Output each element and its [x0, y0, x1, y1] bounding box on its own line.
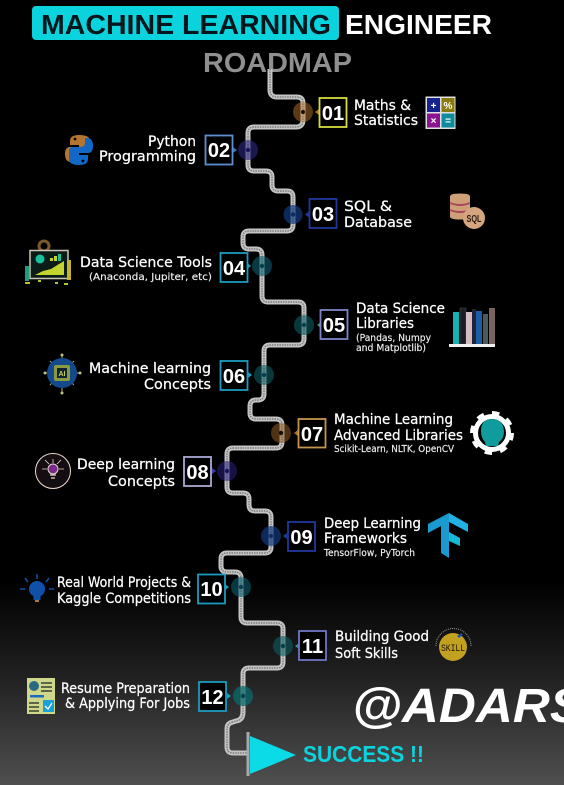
step 06: [44, 354, 274, 394]
step 05: 05: [323, 315, 345, 337]
step 04: (Anaconda, Jupiter, etc): [89, 272, 212, 283]
step 01: Statistics: [354, 113, 418, 129]
icon: calculator symbols: =: [445, 116, 451, 127]
winding road path: [221, 69, 304, 753]
step 10: Real World Projects &: [57, 575, 191, 591]
step 09: [261, 513, 468, 559]
step 08: 08: [186, 462, 209, 484]
step 07: Advanced Libraries: [334, 428, 463, 444]
icon: python logo: [65, 135, 93, 165]
step 02: Python: [148, 134, 196, 150]
icon: blue lightbulb: [20, 574, 54, 602]
step 12: & Applying For Jobs: [65, 696, 190, 712]
title: ROADMAP: [203, 47, 352, 78]
step 04: Data Science Tools: [80, 255, 212, 271]
step 04: [25, 241, 272, 284]
icon: books on shelf: [449, 308, 495, 347]
step 07: Scikit-Learn, NLTK, OpenCV: [334, 444, 454, 455]
step 03: [284, 194, 485, 231]
step 09: Deep Learning: [324, 516, 421, 532]
step 10: Kaggle Competitions: [57, 591, 191, 607]
step 12: 12: [201, 687, 224, 709]
step 08: Concepts: [108, 474, 175, 490]
signature watermark: @ADARS: [352, 680, 564, 733]
success flag: SUCCESS !!: [303, 741, 424, 767]
title: [32, 6, 492, 78]
icon: data dashboard board: [25, 241, 71, 284]
icon: SQL database: SQL: [466, 214, 482, 225]
step 08: [36, 454, 237, 490]
step 11: [273, 629, 471, 662]
icon: calculator symbols: %: [444, 101, 453, 112]
step 08: Deep learning: [77, 457, 175, 473]
icon: calculator symbols: +: [431, 101, 437, 112]
step 03: SQL &: [344, 199, 392, 215]
step 07: Machine Learning: [334, 412, 453, 428]
step 01: 01: [322, 103, 344, 125]
step 01: Maths &: [354, 98, 411, 114]
step 11: 11: [302, 636, 323, 658]
step 05: Libraries: [356, 316, 414, 332]
icon: skill badge: [436, 629, 471, 661]
step 05: (Pandas, Numpy: [356, 333, 431, 344]
icon: SQL database: [417, 194, 485, 229]
step 04: 04: [223, 258, 246, 280]
step 06: Concepts: [144, 377, 211, 393]
step 05: Data Science: [356, 301, 445, 317]
icon: skill badge: SKILL: [441, 644, 465, 655]
step 06: 06: [223, 366, 245, 388]
icon: resume sheet: [27, 678, 55, 714]
icon: TensorFlow logo: [428, 513, 468, 558]
step 05: and Matplotlib): [356, 343, 426, 354]
step 02: Programming: [99, 149, 196, 165]
icon: AI chip: [44, 354, 82, 394]
step 06: Machine learning: [89, 361, 211, 377]
step 07: 07: [301, 424, 323, 446]
title: ENGINEER: [345, 9, 492, 40]
step 03: 03: [312, 204, 334, 226]
step 02: [65, 134, 258, 165]
step 11: Building Good: [335, 629, 429, 645]
step 01: [293, 96, 456, 129]
step 10: [20, 574, 251, 607]
step 11: Soft Skills: [335, 646, 398, 662]
step 07: [271, 412, 511, 455]
step 12: [27, 678, 253, 714]
step 10: 10: [200, 579, 223, 601]
step 12: Resume Preparation: [61, 681, 190, 697]
title: MACHINE LEARNING: [41, 9, 331, 40]
step 09: 09: [290, 527, 313, 549]
step 09: TensorFlow, PyTorch: [323, 548, 415, 559]
icon: AI chip: AI: [58, 371, 66, 378]
icon: calculator symbols: [426, 96, 456, 129]
success flag: [246, 732, 424, 776]
step 09: Frameworks: [324, 531, 407, 547]
step 03: Database: [344, 215, 412, 231]
icon: calculator symbols: ×: [431, 116, 437, 127]
icon: light bulb with nodes: [36, 454, 70, 488]
step 05: [294, 301, 495, 354]
icon: gear with head: [473, 414, 511, 452]
step 02: 02: [208, 140, 230, 162]
